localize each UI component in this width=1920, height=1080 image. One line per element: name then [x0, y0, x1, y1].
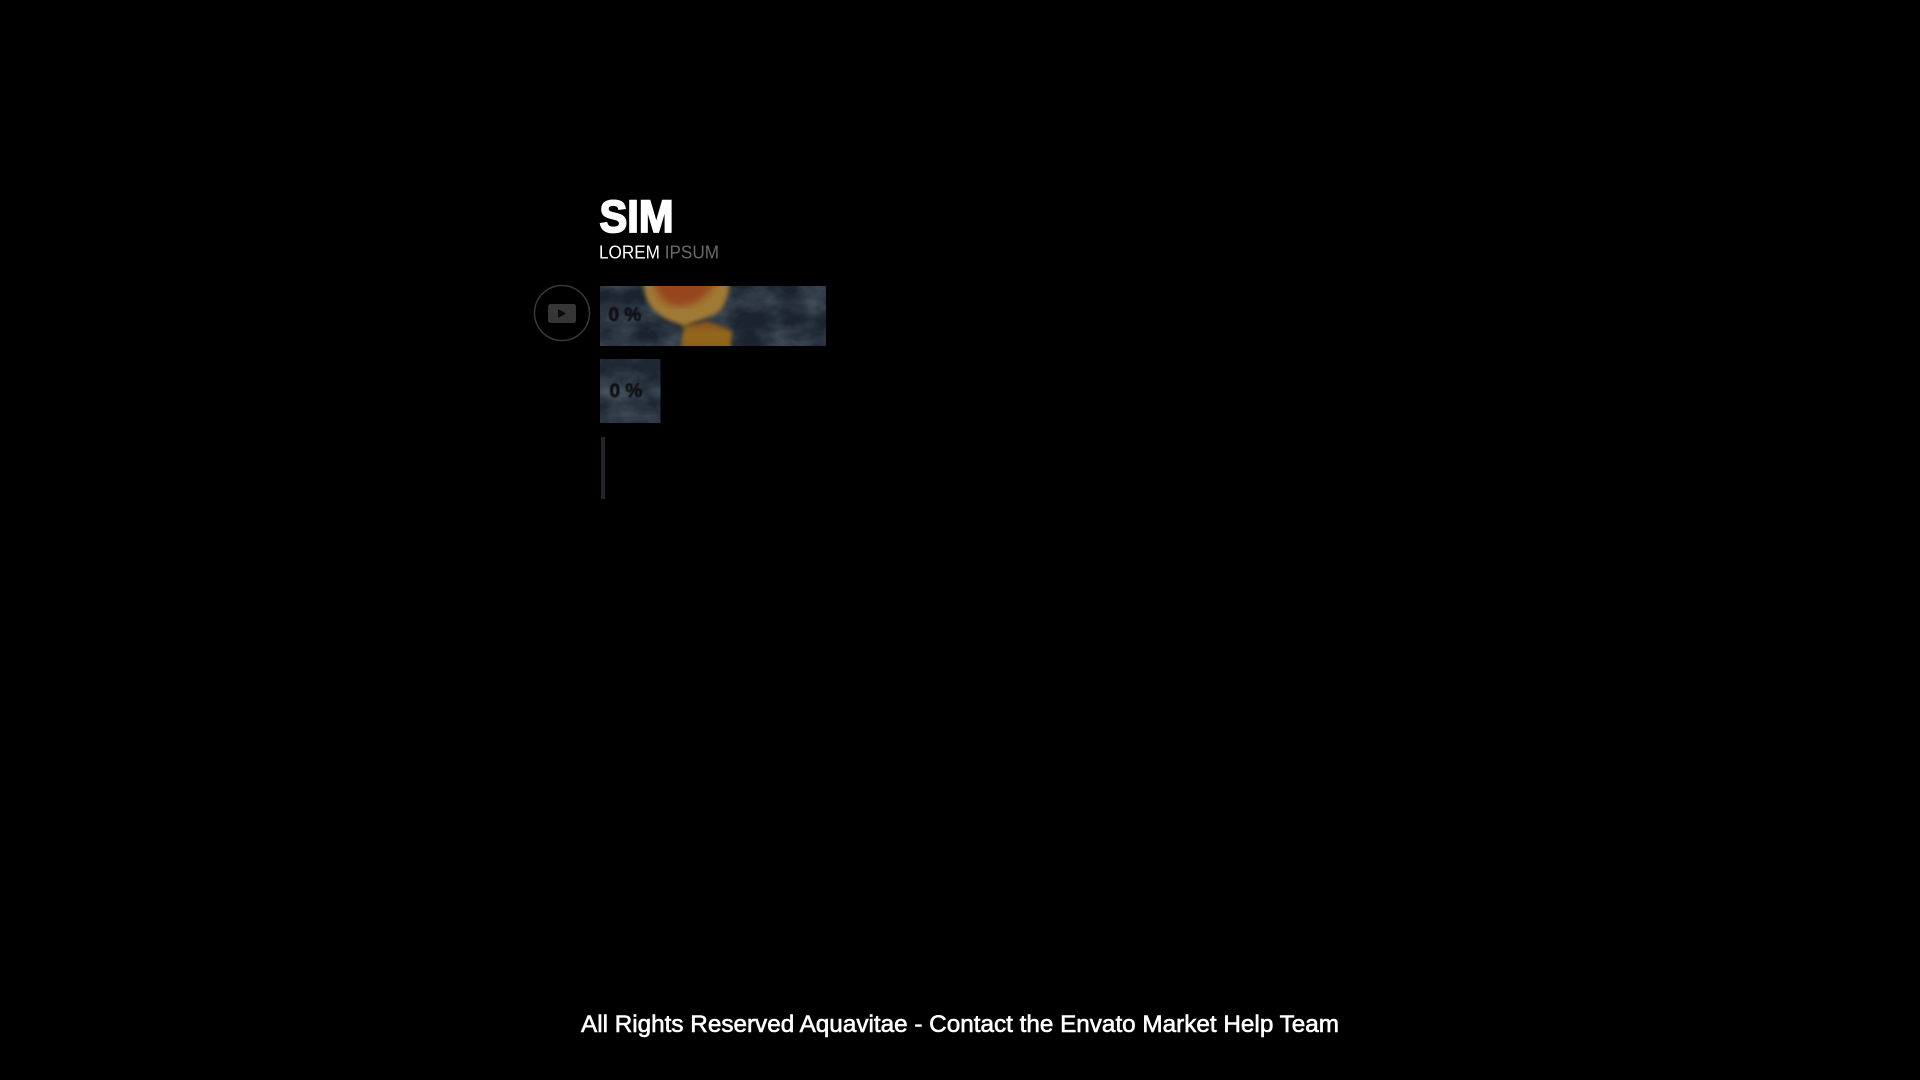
icon: video play badge [534, 286, 590, 340]
footer notice: All Rights Reserved Aquavitae - Contact the Envato Market Help Team [581, 1011, 1339, 1038]
title: SIM: SIM [600, 191, 674, 242]
fruit image [644, 280, 732, 350]
bar 1: textured bar with fruit image [600, 286, 826, 346]
bar 3: thin sliver bar [601, 437, 605, 499]
bar 2: textured bar [600, 359, 660, 423]
bar 1 value: 0 % [608, 305, 641, 326]
bar 2 value: 0 % [610, 381, 642, 402]
subtitle: LOREM IPSUM: LOREM IPSUM [599, 242, 719, 262]
